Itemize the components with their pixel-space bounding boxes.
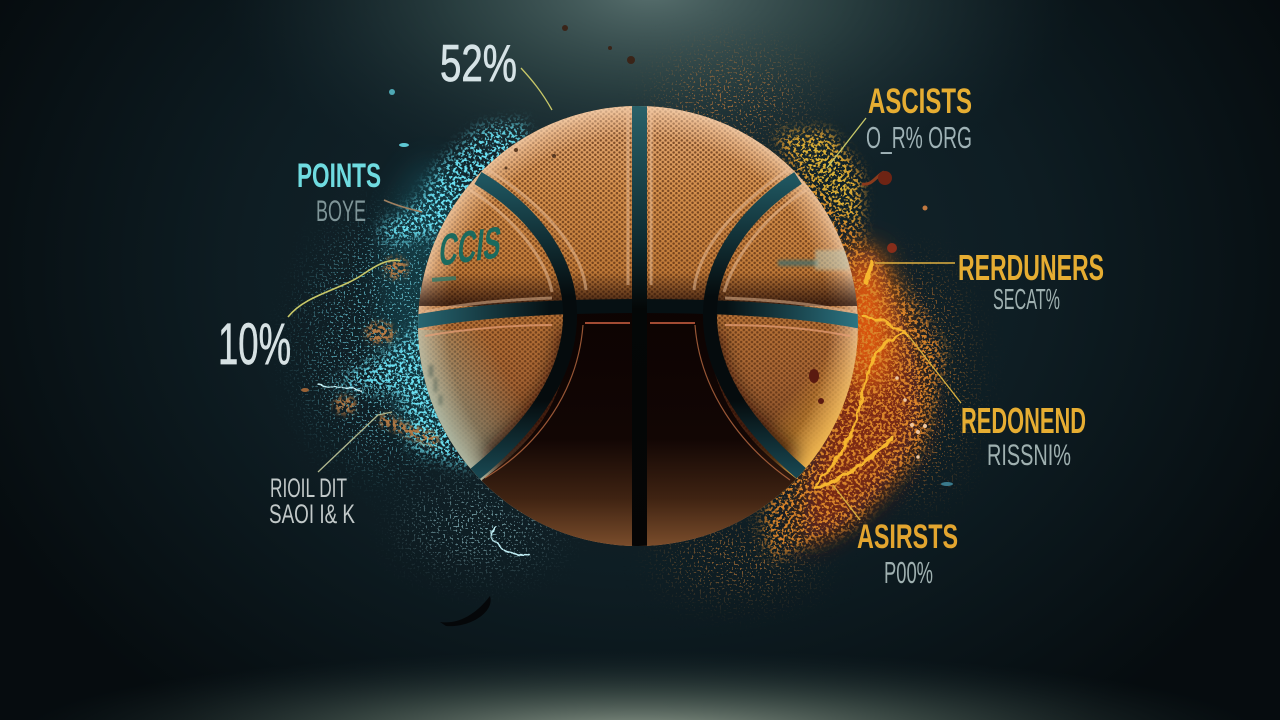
ball surface spots [504,148,824,404]
bottom-left label: SAOI I& K [269,499,355,529]
stat: 52%: 52% [440,35,517,93]
light seam bevel [425,104,850,312]
seam: horizontal [414,306,862,322]
stat: 10%: 10% [218,312,291,377]
dark shading along the lower arcs [490,330,790,462]
panel outlines [425,323,850,480]
sublabel under REDONEND: RISSNI% [987,439,1071,472]
leather dimple texture [418,106,858,548]
bottom-left label: RIOIL DIT [270,473,347,503]
left and right lit tints [418,330,860,520]
right ball print [778,250,849,270]
splash: brown particles above and below the ball [440,25,810,626]
label: ASCISTS: ASCISTS [868,82,972,121]
seam: left arc [475,178,570,474]
leader lines [288,68,961,520]
bottom-left label [269,473,355,529]
dark lower central panels [482,304,798,548]
splash: blue particles on the left [301,89,550,560]
sublabel under ASIRSTS: P00% [884,555,933,590]
label: ASIRSTS: ASIRSTS [857,518,958,556]
splash: orange fire on the right [760,130,960,560]
label: POINTS: POINTS [297,157,381,195]
left ball print [429,365,442,405]
seam: vertical [632,104,647,550]
label: RERDUNERS: RERDUNERS [958,247,1104,288]
ball base shading [418,106,858,548]
sublabel under RERDUNERS: SECAT% [993,284,1060,316]
ball logo subline [432,276,456,282]
dark shading above the horizontal seam [418,272,858,306]
label: REDONEND: REDONEND [961,400,1086,441]
pale rim highlight [418,106,858,546]
basketball [414,104,862,550]
sublabel under POINTS: BOYE [316,195,366,228]
brown debris in the blue splash [334,257,440,448]
sublabel under ASCISTS: O_R% ORG [866,120,972,155]
small debris flecks [301,89,409,392]
ball logo: CCIS [437,218,504,276]
seam: right arc [710,178,802,474]
